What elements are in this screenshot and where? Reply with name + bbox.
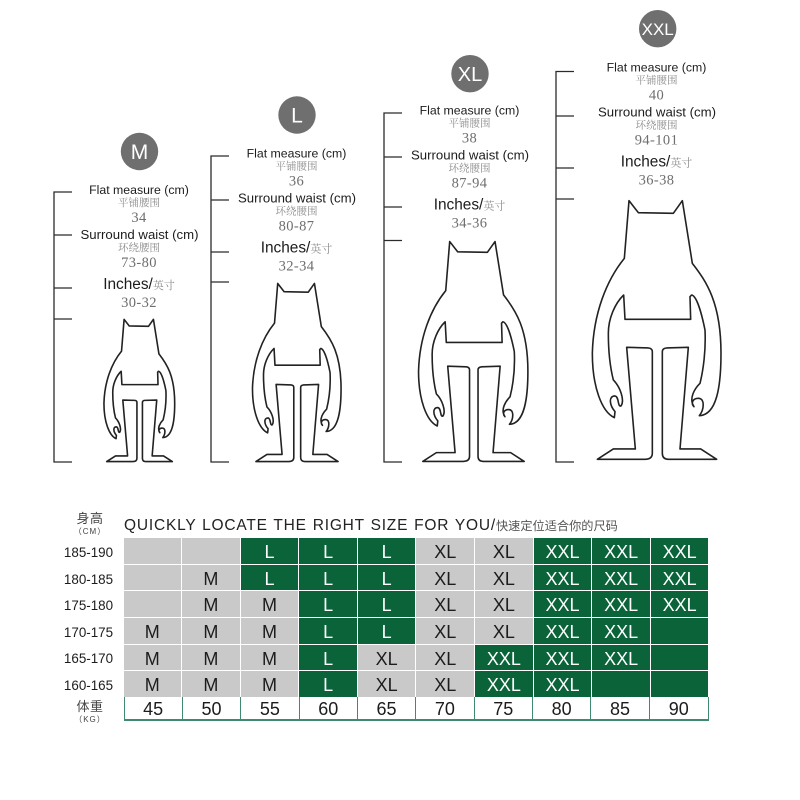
measurements M: Inches/英寸 bbox=[103, 276, 175, 293]
weight row: 75 bbox=[493, 699, 513, 719]
size lookup grid: XL bbox=[493, 569, 515, 589]
size lookup grid: XXL bbox=[487, 649, 521, 669]
size lookup grid: M bbox=[203, 595, 218, 615]
size lookup grid: XXL bbox=[663, 569, 697, 589]
measurements XL: 87-94 bbox=[452, 176, 488, 192]
size lookup grid: XL bbox=[493, 595, 515, 615]
measurements M: 平铺腰围 bbox=[118, 195, 160, 210]
size lookup grid: XXL bbox=[545, 569, 580, 589]
size lookup grid: XXL bbox=[604, 622, 638, 642]
height row labels: 165-170 bbox=[64, 651, 113, 666]
figure M bbox=[104, 319, 175, 462]
height axis title: 身高 bbox=[76, 511, 104, 526]
height row labels bbox=[64, 545, 113, 693]
size lookup grid: M bbox=[262, 622, 277, 642]
height axis title bbox=[74, 511, 106, 536]
panel: size L bbox=[211, 96, 356, 462]
measurements XL: 34-36 bbox=[452, 216, 487, 232]
weight row: 45 bbox=[143, 699, 163, 719]
size lookup grid: XL bbox=[493, 542, 515, 562]
measurements XXL: 36-38 bbox=[639, 172, 674, 188]
size lookup grid: L bbox=[382, 595, 392, 615]
chart title: QUICKLY LOCATE THE RIGHT SIZE FOR YOU/快速定位适合你的尺码 bbox=[124, 517, 618, 534]
figure XXL bbox=[592, 201, 721, 459]
size lookup grid: L bbox=[323, 622, 333, 642]
measurements XXL: 94-101 bbox=[635, 132, 678, 148]
measurements L: 80-87 bbox=[279, 218, 314, 234]
panel: size XXL bbox=[556, 10, 721, 462]
measurements L: 平铺腰围 bbox=[276, 158, 318, 174]
height row labels: 175-180 bbox=[64, 598, 113, 613]
measurements XXL: Inches/英寸 bbox=[621, 154, 692, 170]
size lookup grid: L bbox=[264, 569, 274, 589]
size lookup grid: M bbox=[145, 622, 160, 642]
measurements XXL: Surround waist (cm) bbox=[598, 104, 716, 120]
size lookup grid: XXL bbox=[604, 649, 638, 669]
size badge XL bbox=[451, 55, 489, 92]
measurements XL: Surround waist (cm) bbox=[411, 148, 529, 162]
size badge XXL: XXL bbox=[642, 20, 674, 39]
size lookup grid: XXL bbox=[545, 595, 580, 615]
size lookup grid: XL bbox=[376, 675, 398, 695]
size badge XXL bbox=[639, 10, 676, 47]
measurements XL: Inches/英寸 bbox=[434, 196, 505, 214]
size lookup grid: M bbox=[145, 675, 160, 695]
weight row: 65 bbox=[377, 699, 397, 719]
size badge L bbox=[278, 96, 316, 134]
weight row bbox=[124, 697, 709, 721]
size lookup grid: XL bbox=[376, 649, 398, 669]
size lookup grid: M bbox=[145, 649, 160, 669]
measurements M: Flat measure (cm) bbox=[89, 183, 189, 197]
size lookup grid: L bbox=[264, 542, 274, 562]
measurements M bbox=[80, 183, 198, 311]
size badge M: M bbox=[131, 141, 148, 164]
size lookup grid: XXL bbox=[545, 622, 580, 642]
measurements XL: Flat measure (cm) bbox=[420, 104, 519, 118]
size lookup grid: XL bbox=[434, 595, 456, 615]
weight axis title bbox=[74, 699, 106, 724]
measurements XL bbox=[411, 104, 529, 232]
measurements M: 环绕腰围 bbox=[118, 240, 160, 255]
measurements XL: 环绕腰围 bbox=[448, 160, 490, 176]
size lookup grid: L bbox=[382, 569, 392, 589]
size lookup grid: XXL bbox=[545, 675, 580, 695]
height axis title: （CM） bbox=[74, 527, 106, 536]
size badge XL: XL bbox=[458, 64, 482, 86]
height scale bracket M bbox=[54, 192, 72, 462]
size lookup grid bbox=[124, 538, 708, 697]
size badge M bbox=[121, 133, 158, 170]
size lookup grid: XXL bbox=[663, 595, 697, 615]
size lookup grid: M bbox=[203, 622, 218, 642]
size lookup grid: M bbox=[262, 595, 277, 615]
weight row: 85 bbox=[610, 699, 630, 719]
figure L bbox=[252, 283, 341, 462]
measurements XXL: 环绕腰围 bbox=[636, 118, 678, 132]
weight row: 50 bbox=[202, 699, 222, 719]
size lookup grid: M bbox=[203, 675, 218, 695]
measurements L: 32-34 bbox=[279, 258, 315, 274]
size lookup grid: M bbox=[203, 649, 218, 669]
height row labels: 160-165 bbox=[64, 678, 113, 693]
height scale bracket XXL bbox=[556, 72, 574, 462]
measurements XXL: Flat measure (cm) bbox=[607, 60, 706, 74]
measurements L: Surround waist (cm) bbox=[238, 190, 356, 206]
size lookup grid: XL bbox=[434, 542, 456, 562]
weight axis title: 体重 bbox=[76, 699, 104, 714]
measurements M: Surround waist (cm) bbox=[80, 227, 198, 242]
figure XL bbox=[419, 242, 528, 461]
size lookup grid: XXL bbox=[604, 542, 638, 562]
height row labels: 170-175 bbox=[64, 625, 113, 640]
weight axis title: （KG） bbox=[74, 715, 106, 724]
measurements XXL bbox=[598, 60, 716, 188]
panel: size XL bbox=[384, 55, 529, 462]
size lookup grid: M bbox=[203, 569, 218, 589]
size lookup grid: L bbox=[323, 649, 333, 669]
measurements L: Inches/英寸 bbox=[261, 240, 332, 256]
height row labels: 180-185 bbox=[64, 572, 113, 587]
size lookup grid: XL bbox=[434, 622, 456, 642]
measurements L: 环绕腰围 bbox=[276, 204, 318, 218]
size lookup grid: XXL bbox=[545, 542, 580, 562]
measurements XXL: 平铺腰围 bbox=[636, 72, 678, 88]
size lookup grid: XXL bbox=[487, 675, 521, 695]
size lookup grid: L bbox=[323, 542, 333, 562]
size lookup grid: XL bbox=[434, 675, 456, 695]
weight row: 70 bbox=[435, 699, 455, 719]
measurements XL: 平铺腰围 bbox=[448, 116, 490, 130]
size lookup grid: L bbox=[323, 595, 333, 615]
size badge L: L bbox=[291, 104, 303, 128]
measurements M: 73-80 bbox=[121, 255, 157, 271]
measurements XL: 38 bbox=[462, 130, 477, 146]
size lookup grid: XXL bbox=[604, 569, 638, 589]
weight row: 90 bbox=[669, 699, 689, 719]
size lookup grid: XXL bbox=[663, 542, 697, 562]
size lookup grid: L bbox=[323, 675, 333, 695]
weight row: 55 bbox=[260, 699, 280, 719]
height scale bracket L bbox=[211, 156, 229, 462]
weight row: 80 bbox=[552, 699, 572, 719]
measurements L: 36 bbox=[289, 174, 304, 190]
measurements L: Flat measure (cm) bbox=[247, 146, 346, 160]
size lookup grid: L bbox=[382, 622, 392, 642]
panel: size M bbox=[54, 133, 198, 462]
measurements M: 34 bbox=[131, 210, 147, 226]
size lookup grid: L bbox=[382, 542, 392, 562]
size lookup grid: XXL bbox=[545, 649, 580, 669]
size lookup grid: M bbox=[262, 675, 277, 695]
measurements L bbox=[238, 146, 356, 274]
size lookup grid: L bbox=[323, 569, 333, 589]
height scale bracket XL bbox=[384, 113, 402, 462]
size lookup grid: XL bbox=[434, 569, 456, 589]
size lookup grid: M bbox=[262, 649, 277, 669]
measurements XXL: 40 bbox=[649, 88, 664, 104]
measurements M: 30-32 bbox=[121, 295, 157, 311]
size lookup grid: XL bbox=[493, 622, 515, 642]
height row labels: 185-190 bbox=[64, 545, 113, 560]
weight row: 60 bbox=[318, 699, 338, 719]
size lookup grid: XXL bbox=[604, 595, 638, 615]
size lookup grid: XL bbox=[434, 649, 456, 669]
